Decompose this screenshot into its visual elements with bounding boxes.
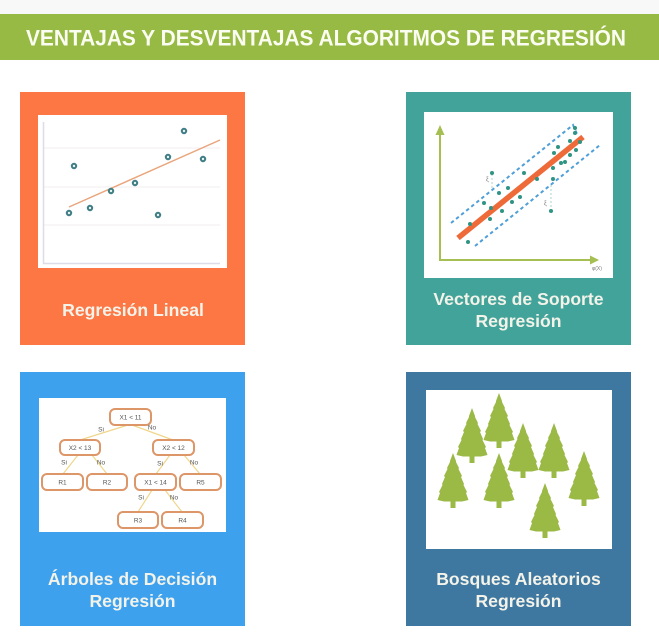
chart: decision tree diagram: Si [98, 426, 104, 434]
label: Árboles de Decisión Regresión: Árboles de Decisión [48, 569, 217, 589]
chart: decision tree diagram: X2 < 12 [162, 445, 185, 452]
label: Vectores de Soporte Regresión: Vectores de Soporte [433, 289, 604, 309]
icon: forest of pine trees [426, 390, 612, 549]
chart: linear regression scatter plot [38, 115, 227, 268]
chart: decision tree diagram: X1 < 14 [144, 480, 167, 486]
panel: Regresión Lineal [20, 92, 245, 345]
chart: decision tree diagram: No [190, 460, 199, 466]
chart: decision tree diagram: X2 < 13 [69, 445, 92, 452]
chart: decision tree diagram: R1 [58, 480, 67, 486]
label: Bosques Aleatorios Regresión: Regresión [475, 591, 562, 611]
chart: support vector regression [424, 112, 613, 278]
chart: decision tree diagram: R2 [103, 480, 112, 486]
chart: decision tree diagram [39, 398, 226, 532]
chart: decision tree diagram: Si [157, 460, 163, 468]
chart: support vector regression: φ(X) [592, 266, 602, 272]
chart: support vector regression: ξ [486, 177, 489, 183]
chart: decision tree diagram: Si [61, 460, 67, 466]
title banner: VENTAJAS Y DESVENTAJAS ALGORITMOS DE REGRESIÓN [26, 26, 626, 50]
panel: Árboles de Decisión Regresión [20, 372, 245, 626]
label: Vectores de Soporte Regresión: Regresión [475, 311, 562, 331]
chart: decision tree diagram: X1 < 11 [119, 414, 142, 422]
chart: decision tree diagram: Si [138, 494, 144, 502]
chart: support vector regression: ξ [544, 201, 547, 207]
chart: decision tree diagram: R5 [196, 480, 205, 486]
chart: decision tree diagram: R4 [178, 518, 187, 524]
label: Árboles de Decisión Regresión: Regresión [89, 591, 176, 611]
label: Regresión Lineal: Regresión Lineal [62, 300, 204, 320]
panel: Bosques Aleatorios Regresión [406, 372, 631, 626]
label: Bosques Aleatorios Regresión: Bosques Aleatorios [436, 569, 601, 589]
title banner [0, 14, 659, 60]
chart: decision tree diagram: R3 [134, 518, 143, 524]
chart: decision tree diagram: No [170, 494, 179, 502]
chart: decision tree diagram: No [97, 460, 106, 466]
panel: Vectores de Soporte Regresión [406, 92, 631, 345]
chart: decision tree diagram: No [148, 424, 157, 432]
